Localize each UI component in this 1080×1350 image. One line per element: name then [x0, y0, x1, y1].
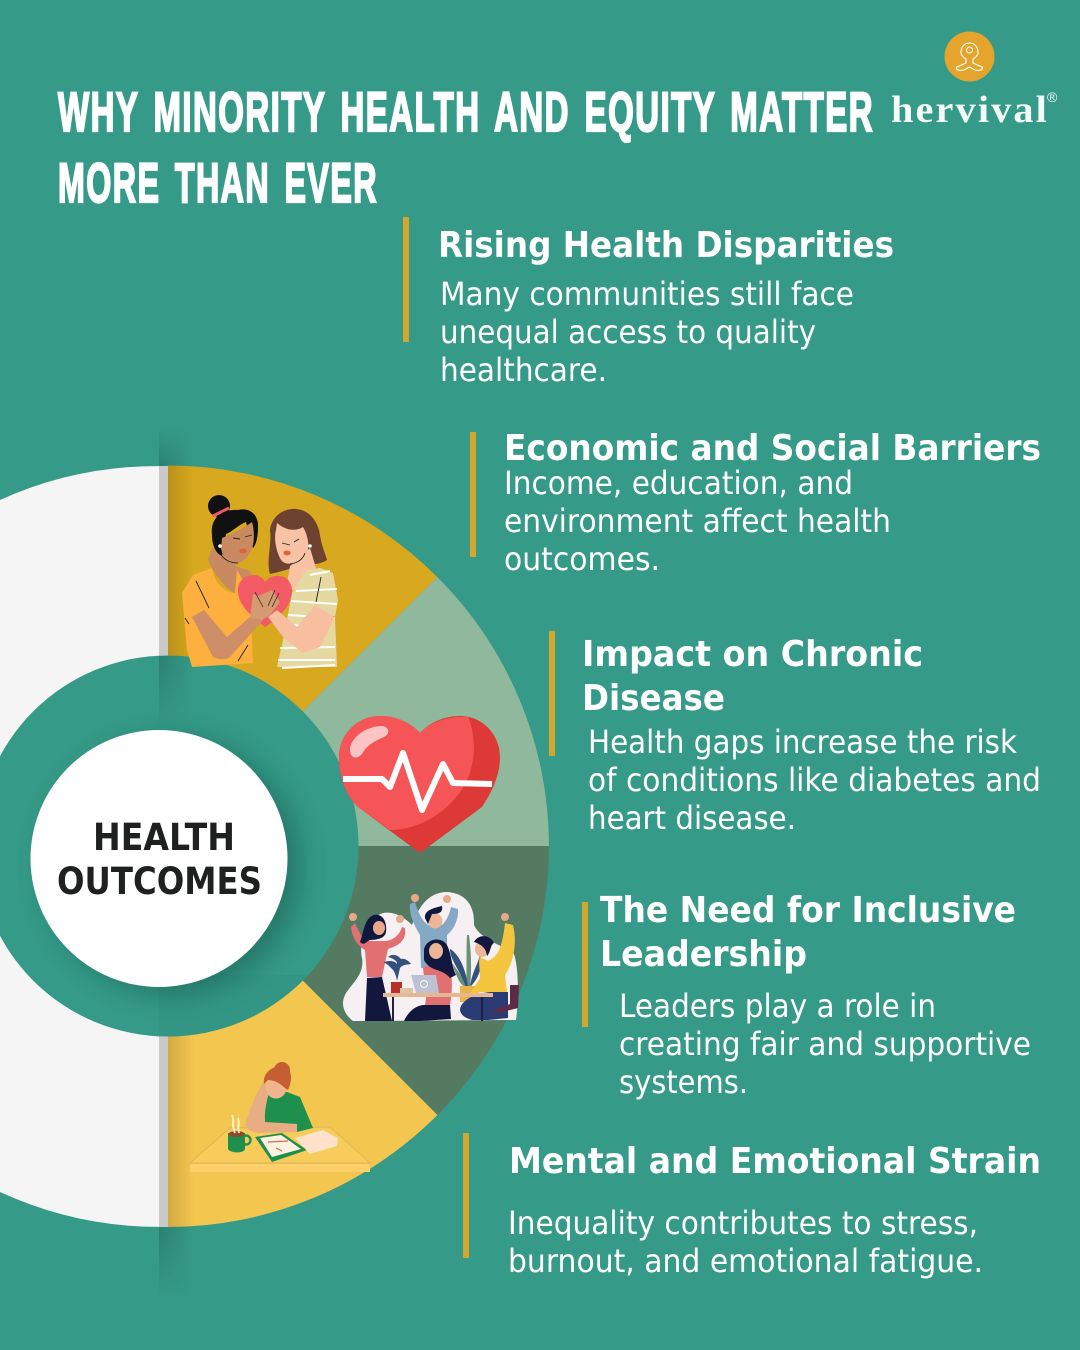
item: economic and social barriers: [470, 428, 1041, 578]
description: of conditions like diabetes and: [588, 761, 1041, 799]
segment: gold: [168, 466, 437, 846]
icon: heart with pulse line: [339, 716, 500, 853]
centre circle: OUTCOMES: [57, 860, 262, 903]
segment: yellow: [168, 846, 437, 1227]
icon: meditating figure badge: [944, 32, 994, 82]
accent bar: [463, 1133, 469, 1258]
heading: Disease: [582, 678, 725, 719]
radial diagram: [0, 428, 549, 1297]
heading: [600, 890, 1016, 975]
description: burnout, and emotional fatigue.: [508, 1242, 983, 1280]
title: [58, 80, 874, 214]
heading: Leadership: [600, 934, 807, 975]
description: environment affect health: [504, 502, 891, 540]
heading: Rising Health Disparities: [438, 225, 894, 266]
illustration: team celebrating at a table: [343, 892, 519, 1021]
illustration: stressed woman at a desk: [190, 1062, 370, 1172]
item: rising health disparities: [403, 217, 894, 389]
segment: sage: [168, 577, 549, 846]
heading: Mental and Emotional Strain: [509, 1141, 1041, 1182]
white left half: [0, 466, 159, 1227]
description: unequal access to quality: [440, 313, 816, 351]
illustration: two women holding a heart: [182, 495, 338, 668]
heading: Economic and Social Barriers: [504, 428, 1041, 469]
description: [440, 275, 854, 389]
heading: Impact on Chronic: [582, 634, 923, 675]
description: systems.: [619, 1063, 748, 1101]
accent bar: [470, 432, 476, 557]
description: heart disease.: [588, 799, 796, 837]
description: creating fair and supportive: [619, 1025, 1031, 1063]
description: Inequality contributes to stress,: [508, 1204, 978, 1242]
heading: [582, 634, 923, 719]
description: outcomes.: [504, 540, 660, 578]
grey divider strip: [159, 466, 168, 1227]
description: Many communities still face: [440, 275, 854, 313]
description: [504, 464, 891, 578]
title: MORE THAN EVER: [58, 151, 378, 214]
description: [588, 723, 1041, 837]
inner teal ring: [0, 656, 368, 1037]
registered mark: ®: [1047, 89, 1058, 105]
description: Income, education, and: [504, 464, 853, 502]
segment: dark green: [168, 846, 549, 1115]
heading: The Need for Inclusive: [600, 890, 1016, 931]
item: impact on chronic disease: [549, 631, 1041, 837]
centre label: HEALTH: [93, 816, 235, 859]
logo: hervival: [891, 32, 1058, 131]
accent bar: [403, 217, 409, 342]
accent bar: [549, 631, 555, 756]
wordmark: hervival: [891, 89, 1049, 131]
accent bar: [582, 902, 588, 1027]
segment shadows: [159, 440, 188, 1275]
description: Health gaps increase the risk: [588, 723, 1017, 761]
description: Leaders play a role in: [619, 987, 936, 1025]
item: the need for inclusive leadership: [582, 890, 1031, 1101]
item: mental and emotional strain: [463, 1133, 1041, 1280]
description: healthcare.: [440, 351, 607, 389]
description: [619, 987, 1031, 1101]
description: [508, 1204, 983, 1280]
centre circle: [30, 730, 288, 987]
